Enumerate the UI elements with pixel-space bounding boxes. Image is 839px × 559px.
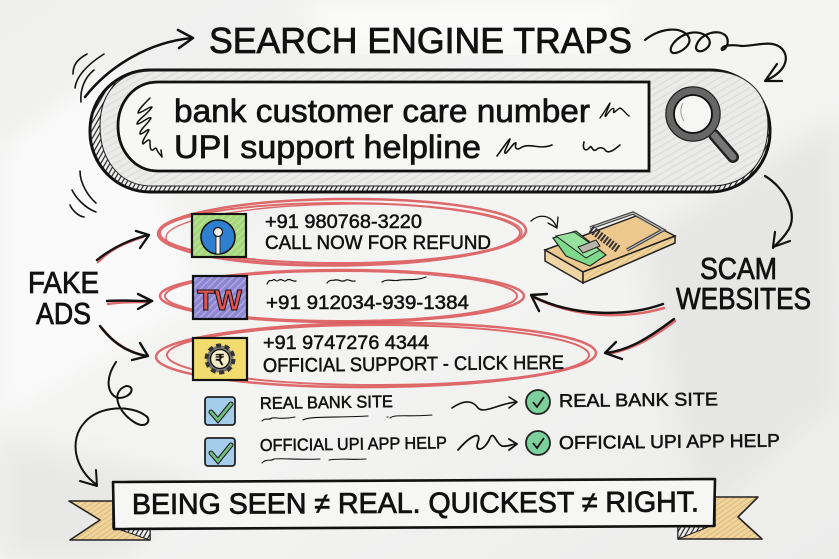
- search bar: [90, 70, 770, 192]
- scribble after line 1: [600, 103, 629, 118]
- curly arrow: title to search bar: [645, 30, 786, 81]
- callout: scam websites label: WEBSITES: [676, 281, 811, 316]
- icon: rupee gear: ₹: [215, 352, 225, 369]
- motion lines near search bar: [70, 54, 104, 217]
- verified label: OFFICIAL UPI APP HELP: [559, 430, 780, 453]
- icon: mousetrap with cash: [545, 213, 675, 283]
- small arrow: listing to trap: [531, 216, 558, 228]
- ad phone number 3: +91 9747276 4344: [263, 333, 429, 354]
- callout: fake ads label: FAKE: [28, 265, 99, 300]
- check item: real bank site: [205, 388, 718, 425]
- callout: fake ads label: ADS: [36, 296, 91, 331]
- arrow: into title: [85, 30, 193, 97]
- red circle 3: [156, 321, 596, 389]
- ad text 3: OFFICIAL SUPPORT - CLICK HERE: [263, 352, 564, 377]
- query text line 1: bank customer care number: [174, 93, 590, 129]
- curly arrow: to banner: [76, 362, 148, 486]
- banner box: [113, 479, 715, 529]
- icon: TW logo: [193, 276, 247, 319]
- verified label: REAL BANK SITE: [559, 388, 718, 411]
- icon: checkbox: [205, 397, 235, 425]
- callout: scam websites label: SCAM: [700, 251, 777, 286]
- icon: rupee gear: [193, 338, 247, 380]
- label: REAL BANK SITE: [260, 392, 393, 413]
- scribble under label: [262, 459, 366, 463]
- icon: green check: [526, 390, 550, 414]
- outer bar shell: [90, 70, 770, 192]
- ad phone number 1: +91 980768-3220: [265, 212, 422, 233]
- red circle 2: [160, 270, 524, 322]
- listing 1: [158, 197, 526, 268]
- check item: official upi app help: [205, 430, 780, 466]
- callout: fake ads label: [28, 265, 99, 331]
- scribble under label: [262, 415, 432, 421]
- banner: [69, 479, 762, 540]
- query input box: [118, 82, 649, 171]
- arrows: scam websites to listings: [531, 294, 675, 359]
- scribble above phone number 2: [267, 277, 426, 284]
- ad text 1: CALL NOW FOR REFUND: [265, 232, 491, 254]
- magnifier icon: [666, 87, 733, 157]
- icon: TW logo: TW: [197, 285, 243, 317]
- scribble left of query: [137, 98, 162, 157]
- callout: scam websites label: [676, 251, 811, 316]
- red circle 1: [158, 197, 526, 268]
- arrows: fake ads to listings: [97, 231, 152, 360]
- squiggle arrow: [452, 397, 517, 410]
- title: SEARCH ENGINE TRAPS: [209, 20, 632, 61]
- icon: checkbox: [205, 438, 235, 466]
- icon: green check: [526, 431, 550, 455]
- scribble after line 2: [497, 139, 620, 156]
- icon: bank logo: [192, 214, 246, 257]
- ribbon right: [678, 497, 762, 539]
- ribbon left: [69, 501, 150, 540]
- outer bar face: [100, 71, 768, 186]
- ad phone number 2: +91 912034-939-1384: [266, 293, 469, 314]
- listing 2: [160, 270, 524, 322]
- arrow: title bar to scam websites: [765, 176, 792, 248]
- squiggle arrow: [458, 436, 517, 450]
- listing 3: [156, 321, 596, 389]
- query text line 2: UPI support helpline: [174, 129, 481, 165]
- label: OFFICIAL UPI APP HELP: [260, 433, 447, 455]
- banner text: BEING SEEN ≠ REAL. QUICKEST ≠ RIGHT.: [132, 487, 699, 521]
